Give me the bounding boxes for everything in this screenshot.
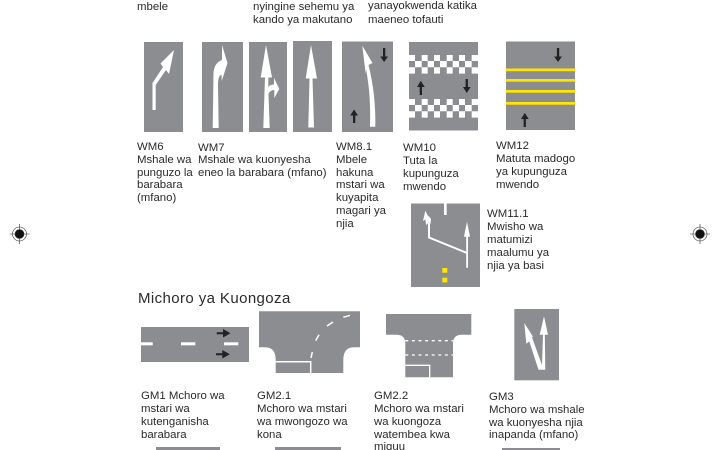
GM2.1 caption: kona bbox=[257, 429, 282, 441]
WM7 caption: Mshale wa kuonyesha bbox=[198, 154, 311, 166]
GM2.2 sign bbox=[386, 314, 471, 377]
GM2.1 sign bbox=[259, 311, 360, 373]
WM12 sign bbox=[506, 42, 575, 130]
WM12 caption bbox=[496, 140, 575, 191]
bottom edge of next row signs bbox=[156, 447, 560, 450]
top text fragments: kando ya makutano bbox=[253, 14, 352, 26]
GM1 sign bbox=[141, 327, 249, 362]
WM6 caption: barabara bbox=[137, 179, 183, 191]
GM2.2 caption: GM2.2 bbox=[374, 390, 408, 402]
WM7 sign a bbox=[202, 42, 243, 132]
WM8.1 caption bbox=[336, 141, 387, 230]
GM3 caption: Mchoro wa mshale bbox=[489, 404, 585, 416]
GM2.1 caption bbox=[256, 390, 348, 441]
WM6 caption: WM6 bbox=[137, 141, 164, 153]
WM10 caption: mwendo bbox=[403, 181, 446, 193]
top text fragments: maeneo tofauti bbox=[368, 14, 443, 26]
WM8.1 caption: kuyapita bbox=[336, 192, 379, 204]
WM8.1 caption: mstari wa bbox=[336, 179, 385, 191]
WM11.1 caption bbox=[487, 208, 550, 272]
WM7 sign c bbox=[293, 41, 332, 132]
WM11.1 sign bbox=[411, 204, 480, 287]
WM12 caption: Matuta madogo bbox=[496, 153, 575, 165]
WM12 caption: mwendo bbox=[496, 179, 539, 191]
WM8.1 sign bbox=[342, 42, 393, 132]
top text fragments: yanayokwenda katika bbox=[368, 0, 478, 12]
top text fragments: nyingine sehemu ya bbox=[253, 1, 355, 13]
GM2.2 caption bbox=[373, 390, 464, 450]
GM2.1 caption: wa mwongozo wa bbox=[256, 416, 348, 428]
GM2.1 caption: GM2.1 bbox=[257, 390, 291, 402]
WM10 caption bbox=[403, 142, 459, 193]
GM3 caption: wa kuonyesha njia bbox=[488, 417, 583, 429]
WM6 sign bbox=[144, 42, 183, 132]
GM1 caption bbox=[141, 390, 225, 441]
WM11.1 caption: Mwisho wa bbox=[487, 221, 544, 233]
GM1 caption: GM1 Mchoro wa bbox=[141, 390, 225, 402]
top text fragments bbox=[137, 0, 478, 26]
WM11.1 caption: njia ya basi bbox=[487, 260, 544, 272]
WM10 caption: kupunguza bbox=[403, 168, 459, 180]
WM12 caption: ya kupunguza bbox=[496, 166, 568, 178]
WM11.1 caption: WM11.1 bbox=[487, 208, 529, 220]
WM8.1 caption: njia bbox=[336, 218, 354, 230]
GM1 caption: mstari wa bbox=[141, 403, 190, 415]
WM12 caption: WM12 bbox=[496, 140, 529, 152]
WM7 caption: eneo la barabara (mfano) bbox=[198, 167, 327, 179]
WM11.1 caption: maalumu ya bbox=[487, 247, 550, 259]
GM3 caption: inapanda (mfano) bbox=[489, 429, 578, 441]
WM7 caption: WM7 bbox=[198, 142, 225, 154]
WM8.1 caption: hakuna bbox=[336, 167, 374, 179]
GM2.2 caption: watembea kwa bbox=[373, 429, 451, 441]
section heading: Michoro ya Kuongoza bbox=[138, 290, 291, 307]
GM1 caption: barabara bbox=[141, 429, 187, 441]
GM1 caption: kutenganisha bbox=[141, 416, 209, 428]
GM2.2 caption: Mchoro wa mstari bbox=[374, 403, 464, 415]
GM2.2 caption: wa kuongoza bbox=[373, 416, 442, 428]
WM8.1 caption: magari ya bbox=[336, 205, 387, 217]
GM3 sign bbox=[514, 309, 559, 380]
WM11.1 caption: matumizi bbox=[487, 234, 533, 246]
WM7 caption bbox=[198, 142, 327, 179]
GM3 caption: GM3 bbox=[489, 391, 514, 403]
WM10 caption: Tuta la bbox=[403, 155, 438, 167]
WM6 caption: Mshale wa bbox=[137, 154, 192, 166]
registration mark right bbox=[690, 224, 710, 244]
WM6 caption: punguzo la bbox=[137, 167, 193, 179]
WM6 caption bbox=[137, 141, 193, 204]
WM8.1 caption: WM8.1 bbox=[336, 141, 372, 153]
WM10 caption: WM10 bbox=[403, 142, 436, 154]
WM7 sign b bbox=[249, 42, 287, 132]
WM6 caption: (mfano) bbox=[137, 192, 176, 204]
GM3 caption bbox=[488, 391, 585, 441]
WM8.1 caption: Mbele bbox=[336, 154, 367, 166]
WM10 sign bbox=[409, 42, 478, 130]
GM2.1 caption: Mchoro wa mstari bbox=[257, 403, 347, 415]
registration mark left bbox=[10, 224, 30, 244]
top text fragments: mbele bbox=[137, 1, 168, 13]
